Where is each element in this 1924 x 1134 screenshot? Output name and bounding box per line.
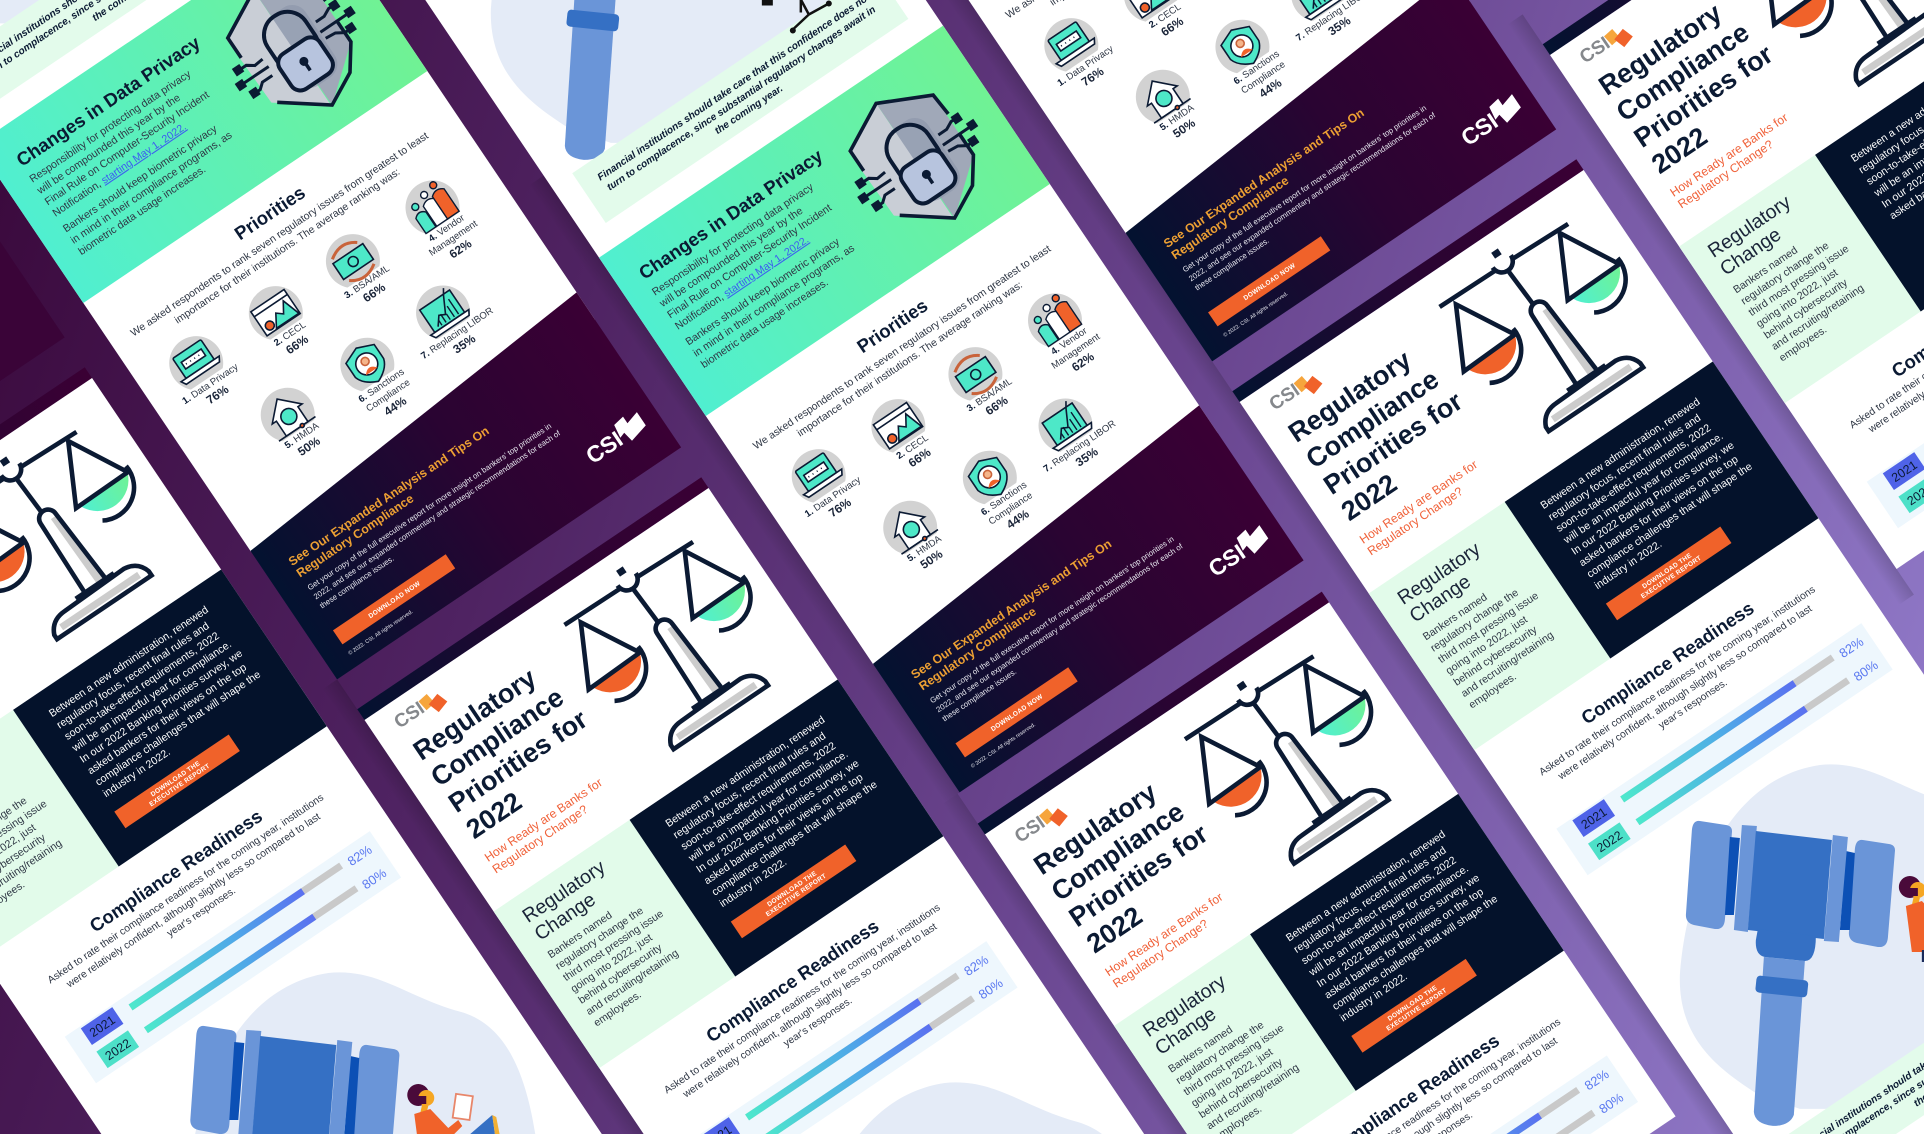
- title: Compliance: [1611, 17, 1755, 127]
- dark panel: introduction: Between a new administration, renewed: [1539, 396, 1702, 512]
- dark panel: introduction: In our 2022 Banking Priorities survey, we: [78, 647, 245, 766]
- title: 2022: [1646, 121, 1713, 180]
- panel: changes in data privacy: Notification, starting May 1, 2022.: [50, 121, 189, 219]
- logo: CSI: [1576, 20, 1635, 71]
- panel: changes in data privacy: Final Rule on Computer-Security Incident: [665, 202, 834, 321]
- dark panel: introduction: compliance challenges that will shape the: [710, 779, 880, 899]
- priority: replacing LIBOR: 35%: [450, 331, 478, 356]
- page: right column, regulatory compliance infographic: [1508, 0, 1924, 605]
- callout: the coming year.: [713, 83, 785, 137]
- bar chart: compliance readiness: 80%: [976, 975, 1006, 1002]
- green panel: regulatory change: employees.: [1467, 671, 1519, 711]
- green panel: regulatory change: Bankers named: [1166, 1024, 1235, 1076]
- icon: shield and padlock: [197, 0, 391, 144]
- illustration: gavel blob: [805, 1082, 1153, 1134]
- heading: priorities: Priorities: [230, 182, 309, 244]
- dark panel: introduction: compliance challenges that will shape the: [1585, 461, 1755, 581]
- dark panel: introduction: DOWNLOAD THE: [1387, 984, 1439, 1023]
- bar chart: compliance readiness: [1556, 623, 1893, 875]
- bar chart: compliance readiness: [681, 941, 1018, 1134]
- dark panel: introduction: EXECUTIVE REPORT: [1385, 987, 1448, 1033]
- priority: vendor management: 4. Vendor: [427, 213, 467, 245]
- page: far-left column, regulatory compliance infographic: [0, 346, 705, 1134]
- dark panel: introduction: will be an impactful year for compliance.: [686, 748, 850, 865]
- green panel: regulatory change: Change: [1716, 224, 1785, 280]
- dark panel: introduction: EXECUTIVE REPORT: [1640, 555, 1703, 600]
- panel: changes in data privacy: in mind in their compliance programs, as: [69, 129, 234, 247]
- dark panel: introduction: soon-to-take-effect requirements, 2022: [62, 630, 222, 743]
- priority: vendor management: [1015, 281, 1112, 384]
- priority: replacing LIBOR: 35%: [1073, 444, 1101, 469]
- footer panel: expanded analysis: See Our Expanded Analysis and Tips On: [908, 537, 1114, 682]
- green panel: regulatory change: employees.: [592, 989, 644, 1029]
- text: compliance intro: year's responses.: [782, 996, 854, 1050]
- logo: CSI: [391, 685, 450, 736]
- priority: data privacy: 1. Data Privacy: [1056, 43, 1116, 89]
- bar chart: compliance readiness: 2021: [87, 1013, 118, 1040]
- dark panel: introduction: [630, 680, 943, 977]
- bar chart: compliance readiness: 80%: [1596, 1089, 1627, 1117]
- page: far-left column, footer of upper page: [0, 190, 65, 569]
- priority: replacing LIBOR: 35%: [1326, 13, 1354, 38]
- priority: HMDA: [1123, 58, 1213, 151]
- logo: CSI: CSI: [1011, 812, 1049, 848]
- priority: sanctions compliance: 44%: [381, 393, 409, 419]
- illustration: gavel: [1680, 764, 1924, 1126]
- priority: sanctions compliance: Compliance: [1239, 59, 1287, 97]
- callout: [572, 0, 908, 223]
- priority: sanctions compliance: [327, 326, 424, 429]
- footer panel: expanded analysis: 2022, and see our expanded commentary and strategic recommendations for each of: [1187, 110, 1438, 283]
- dark panel: introduction: compliance challenges that will shape the: [93, 669, 263, 789]
- green panel: regulatory change: third most pressing issue: [1436, 590, 1541, 666]
- footer panel: expanded analysis: [233, 292, 681, 679]
- bar chart: compliance readiness: 2022: [103, 1036, 134, 1063]
- green panel: regulatory change: and recruiting/retaining: [584, 947, 681, 1018]
- footer panel: expanded analysis: Get your copy of the full executive report for more insight on bankers' top priorities in: [306, 421, 553, 592]
- bar chart: compliance readiness: 2021: [1579, 805, 1609, 832]
- green panel: regulatory change: Bankers named: [1421, 591, 1490, 643]
- priority: sanctions compliance: Compliance: [364, 377, 412, 415]
- subtitle: Regulatory Change?: [1675, 137, 1776, 211]
- bar chart: compliance readiness: 2022: [1594, 828, 1625, 855]
- dark panel: introduction: [1505, 362, 1818, 659]
- dark panel: introduction: regulatory focus, recent final rules and: [1292, 844, 1449, 956]
- priority: data privacy: [1029, 4, 1124, 101]
- panel: changes in data privacy: biometric data usage increases.: [76, 164, 208, 258]
- bar chart: compliance readiness: 80%: [1851, 657, 1881, 684]
- green panel: regulatory change: behind cybersecurity: [1451, 623, 1540, 689]
- green panel: regulatory change: and recruiting/retaining: [1204, 1062, 1301, 1132]
- dark panel: introduction: industry in 2022.: [1338, 971, 1410, 1024]
- text: priorities intro: importance for their institutions. The average ranking was:: [796, 280, 1025, 439]
- footer panel: expanded analysis: CSI: [1456, 108, 1502, 151]
- priority: CECL: 2. CECL: [894, 432, 931, 462]
- panel: changes in data privacy: will be compounded this year by the: [34, 92, 183, 197]
- page: fourth column, lower part of the infographic: [943, 0, 1556, 371]
- dark panel: introduction: DOWNLOAD THE: [766, 870, 818, 908]
- green panel: regulatory change: regulatory change the: [553, 905, 646, 972]
- green panel: regulatory change: regulatory change the: [1174, 1019, 1266, 1087]
- priority: BSA/AML: [313, 222, 403, 315]
- panel: changes in data privacy: Changes in Data Privacy: [12, 31, 204, 170]
- heading: compliance readiness: Compliance Readiness: [702, 915, 883, 1046]
- footer panel: expanded analysis: these compliance issues.: [1193, 236, 1271, 292]
- priority: vendor management: Management: [1050, 331, 1102, 372]
- title: Compliance: [425, 682, 569, 792]
- logo: CSI: CSI: [1576, 33, 1614, 68]
- priority: BSA/AML: 66%: [983, 393, 1011, 418]
- priority: replacing LIBOR: 7. Replacing LIBOR: [1042, 418, 1118, 475]
- priority: data privacy: 1. Data Privacy: [803, 474, 863, 520]
- priority: BSA/AML: 66%: [360, 280, 388, 305]
- footer panel: expanded analysis: Get your copy of the full executive report for more insight on bankers' top priorities in: [1181, 103, 1428, 274]
- title: 2022: [1336, 468, 1402, 527]
- priority: sanctions compliance: 44%: [1257, 75, 1285, 101]
- dark panel: introduction: DOWNLOAD THE: [1641, 552, 1694, 590]
- subtitle: How Ready are Banks for: [1102, 890, 1225, 979]
- green panel: regulatory change: third most pressing issue: [561, 908, 666, 984]
- priority: CECL: [1111, 0, 1201, 49]
- bar chart legend: [1867, 276, 1924, 528]
- title: Regulatory: [1593, 0, 1727, 101]
- dark panel: introduction: regulatory focus, recent final rules and: [1546, 412, 1703, 523]
- logo: CSI: [1011, 799, 1070, 850]
- green panel: regulatory change: behind cybersecurity: [576, 941, 665, 1007]
- priority: HMDA: [870, 489, 960, 582]
- dark panel: introduction: asked bankers for their views on the top: [1322, 886, 1486, 1001]
- priority: HMDA: 50%: [1170, 116, 1198, 141]
- callout: turn to complacence, since substantial regulatory changes await in: [605, 4, 878, 193]
- priorities grid: [154, 166, 542, 509]
- priority: data privacy: 76%: [826, 495, 854, 520]
- dark panel: introduction: soon-to-take-effect requirements, 2022: [1299, 854, 1459, 967]
- green panel: regulatory change: Regulatory: [1139, 970, 1230, 1042]
- footer panel: expanded analysis: See Our Expanded Analysis and Tips On: [286, 424, 492, 569]
- dark panel: introduction: Between a new administration, renewed: [1284, 828, 1448, 944]
- subtitle: Regulatory Change?: [1365, 484, 1466, 558]
- priority: sanctions compliance: [950, 439, 1047, 542]
- icon: scales of justice: [1417, 196, 1677, 452]
- dark panel: introduction: In our 2022 Banking Priorities survey, we: [1569, 439, 1737, 558]
- panel: changes in data privacy: in mind in their compliance programs, as: [691, 242, 857, 360]
- footer panel: expanded analysis: Get your copy of the full executive report for more insight on bankers' top priorities in: [928, 534, 1176, 705]
- dark panel: introduction: EXECUTIVE REPORT: [765, 873, 828, 918]
- green panel: regulatory change: behind cybersecurity: [1762, 276, 1850, 342]
- panel: changes in data privacy: biometric data usage increases.: [699, 277, 831, 371]
- footer panel: expanded analysis: 2022, and see our expanded commentary and strategic recommendations for each of: [312, 428, 563, 601]
- dark panel: introduction: soon-to-take-effect requirements, 2022: [1554, 422, 1713, 535]
- title: Priorities for: [443, 704, 593, 818]
- footer panel: expanded analysis: [1108, 0, 1556, 361]
- dark panel: introduction: Between a new administration, renewed: [663, 714, 827, 830]
- illustration: gavel and reader: [188, 972, 539, 1134]
- title: Regulatory: [1028, 777, 1162, 881]
- dark panel: introduction: [13, 570, 327, 867]
- dark panel: introduction: Between a new administration, renewed: [47, 604, 211, 720]
- text: compliance intro: year's responses.: [1657, 678, 1730, 732]
- title: Priorities for: [1629, 39, 1779, 153]
- green panel: regulatory change: Change: [531, 889, 600, 945]
- priority: data privacy: 1. Data Privacy: [180, 361, 241, 407]
- dark panel: introduction: industry in 2022.: [1593, 538, 1664, 592]
- green panel: regulatory change: Change: [1406, 571, 1475, 627]
- heading: compliance readiness: Compliance Readiness: [1577, 597, 1758, 728]
- panel: changes in data privacy: [599, 26, 1050, 416]
- page: second column, regulatory compliance infographic: [312, 427, 1313, 1134]
- priority: replacing LIBOR: 7. Replacing LIBOR: [419, 305, 496, 362]
- priority: CECL: [858, 387, 948, 480]
- text: priorities intro: importance for their institutions. The average ranking was:: [173, 167, 402, 326]
- text: compliance intro: year's responses.: [165, 886, 238, 940]
- dark panel: introduction: industry in 2022.: [717, 856, 789, 910]
- priority: HMDA: [248, 376, 338, 469]
- green panel: regulatory change: and recruiting/retaining: [1459, 629, 1556, 700]
- green panel: regulatory change: Bankers named: [1731, 244, 1800, 296]
- panel: changes in data privacy: Responsibility for protecting data privacy: [650, 181, 816, 298]
- footer panel: expanded analysis: Regulatory Compliance: [294, 491, 416, 580]
- priority: data privacy: [777, 435, 871, 532]
- bar chart: compliance readiness: 82%: [1582, 1066, 1612, 1093]
- green panel: regulatory change: [494, 820, 735, 1068]
- text: compliance intro: were relatively confident, although slightly less so compared to last: [64, 811, 323, 991]
- priority: CECL: 2. CECL: [272, 319, 309, 349]
- priority: data privacy: 76%: [204, 382, 232, 407]
- icon: scales of justice: [1163, 628, 1422, 884]
- page: left column, lower part of the infographic: [0, 0, 711, 696]
- bar chart: compliance readiness: 82%: [1836, 634, 1867, 661]
- priority: CECL: 66%: [283, 332, 311, 357]
- priority: replacing LIBOR: [393, 266, 503, 373]
- bar chart: compliance readiness: 80%: [359, 865, 390, 892]
- green panel: regulatory change: going into 2022, just: [1189, 1046, 1275, 1110]
- green panel: regulatory change: and recruiting/retaining: [1769, 282, 1866, 353]
- dark panel: introduction: asked bankers for their views on the top: [85, 661, 249, 777]
- title: 2022: [1081, 901, 1148, 959]
- green panel: regulatory change: third most pressing issue: [1182, 1022, 1286, 1098]
- heading: priorities: Priorities: [853, 295, 932, 357]
- priorities grid: [1029, 0, 1417, 191]
- green panel: regulatory change: Regulatory: [519, 856, 610, 927]
- green panel: regulatory change: employees.: [1777, 324, 1829, 364]
- panel: changes in data privacy: Notification, starting May 1, 2022.: [673, 234, 811, 332]
- footer panel: expanded analysis: these compliance issues.: [941, 667, 1018, 723]
- dark panel: introduction: regulatory focus, recent final rules and: [671, 730, 828, 841]
- footer panel: expanded analysis: CSI: [581, 426, 627, 469]
- priority: sanctions compliance: 6. Sanctions: [357, 367, 407, 405]
- text: compliance intro: Asked to rate their compliance readiness for the coming year, institutions: [1538, 584, 1818, 778]
- priorities grid: [777, 279, 1164, 622]
- footer panel: expanded analysis: DOWNLOAD NOW: [367, 580, 422, 620]
- priority: sanctions compliance: 6. Sanctions: [1232, 49, 1282, 87]
- bar chart: compliance readiness: 82%: [345, 842, 375, 869]
- text: priorities intro: We asked respondents to rank seven regulatory issues from greatest to least: [751, 244, 1053, 452]
- dark panel: introduction: will be an impactful year for compliance.: [1306, 863, 1471, 979]
- illustration: gavel: [491, 0, 839, 160]
- dark panel: introduction: [1250, 794, 1564, 1091]
- priority: vendor management: 4. Vendor: [1049, 326, 1089, 358]
- dark panel: introduction: soon-to-take-effect requirements, 2022: [679, 740, 838, 853]
- priority: sanctions compliance: 6. Sanctions: [979, 480, 1029, 518]
- illustration: reader in chair: [1899, 876, 1924, 1006]
- bar chart: compliance readiness: 82%: [961, 952, 992, 979]
- title: Compliance: [1301, 364, 1444, 474]
- priority: HMDA: 50%: [918, 547, 946, 572]
- footer panel: expanded analysis: © 2022. CSI. All rights reserved.: [347, 608, 414, 657]
- bar chart: compliance readiness: [1302, 1055, 1638, 1134]
- priority: CECL: [236, 274, 326, 367]
- footer panel: expanded analysis: CSI: [1204, 539, 1250, 582]
- title: Compliance: [1046, 796, 1190, 907]
- footer panel: expanded analysis: DOWNLOAD NOW: [990, 693, 1045, 733]
- dark panel: introduction: will be an impactful year for compliance.: [69, 638, 234, 755]
- green panel: regulatory change: going into 2022, just: [1754, 267, 1840, 330]
- panel: changes in data privacy: will be compounded this year by the: [657, 205, 805, 310]
- subtitle: How Ready are Banks for: [1357, 457, 1480, 547]
- priority: BSA/AML: 3. BSA/AML: [342, 263, 392, 301]
- priority: vendor management: 62%: [1069, 349, 1097, 374]
- subtitle: How Ready are Banks for: [482, 775, 605, 865]
- icon: shield and padlock: [820, 63, 1013, 257]
- text: compliance intro: Asked to rate their compliance readiness for the coming year, institutions: [46, 792, 326, 986]
- priority: sanctions compliance: [1202, 8, 1299, 111]
- title: Regulatory: [408, 663, 542, 766]
- illustration: reader in chair: [700, 0, 832, 33]
- green panel: regulatory change: [1679, 155, 1921, 403]
- priority: CECL: 66%: [1158, 14, 1186, 39]
- logo: CSI: [1266, 367, 1325, 418]
- footer panel: expanded analysis: © 2022. CSI. All rights reserved.: [1222, 290, 1289, 339]
- priority: HMDA: 5. HMDA: [1158, 102, 1197, 133]
- panel: changes in data privacy: Bankers should keep biometric privacy: [683, 236, 842, 348]
- priority: sanctions compliance: Compliance: [987, 490, 1035, 528]
- heading: compliance readiness: Compliance Readiness: [86, 805, 266, 936]
- icon: scales of justice: [0, 404, 185, 660]
- green panel: regulatory change: [1369, 502, 1610, 750]
- dark panel: introduction: DOWNLOAD THE: [150, 760, 202, 798]
- dark panel: introduction: EXECUTIVE REPORT: [148, 763, 211, 808]
- priority: CECL: 2. CECL: [1147, 1, 1184, 31]
- green panel: regulatory change: [1114, 934, 1356, 1134]
- green panel: regulatory change: Regulatory: [1394, 538, 1485, 609]
- bar chart: compliance readiness: [65, 831, 401, 1083]
- blob: [0, 0, 207, 23]
- callout: [0, 0, 286, 110]
- dark panel: introduction: compliance challenges that will shape the: [1330, 893, 1500, 1013]
- dark panel: introduction: In our 2022 Banking Priorities survey, we: [694, 757, 861, 876]
- dark panel: introduction: will be an impactful year for compliance.: [1561, 430, 1725, 547]
- bar chart legend: 2021: [1889, 458, 1920, 485]
- dark panel: introduction: [1815, 15, 1924, 312]
- priority: sanctions compliance: 44%: [1004, 506, 1032, 532]
- green panel: regulatory change: regulatory change the: [1428, 587, 1521, 654]
- priority: HMDA: 50%: [295, 434, 323, 459]
- subtitle: Regulatory Change?: [1110, 916, 1211, 991]
- green panel: regulatory change: third most pressing issue: [1747, 243, 1851, 319]
- priority: CECL: 66%: [906, 445, 934, 470]
- green panel: regulatory change: Regulatory: [1704, 191, 1795, 262]
- panel: changes in data privacy: Final Rule on Computer-Security Incident: [43, 89, 212, 208]
- priority: vendor management: 62%: [447, 236, 475, 261]
- page: middle column, lower part of the infographic: [323, 0, 1338, 812]
- title: Priorities for: [1318, 386, 1468, 500]
- page: middle column, regulatory compliance infographic: [943, 562, 1693, 1134]
- subtitle: How Ready are Banks for: [1667, 110, 1790, 200]
- dark panel: introduction: asked bankers for their views on the top: [1577, 453, 1740, 569]
- priority: data privacy: 76%: [1079, 64, 1107, 89]
- green panel: regulatory change: going into 2022, just: [1444, 614, 1530, 677]
- text: compliance intro: Asked to rate their compliance readiness for the coming year, institutions: [662, 902, 942, 1096]
- green panel: regulatory change: [0, 710, 119, 958]
- title: Priorities for: [1064, 818, 1214, 933]
- footer panel: expanded analysis: these compliance issues.: [318, 554, 396, 610]
- green panel: regulatory change: going into 2022, just: [569, 932, 655, 995]
- priority: BSA/AML: 3. BSA/AML: [965, 376, 1015, 414]
- panel: changes in data privacy: Bankers should keep biometric privacy: [61, 123, 220, 235]
- green panel: regulatory change: regulatory change the: [1739, 240, 1831, 307]
- logo: CSI: CSI: [1266, 380, 1304, 415]
- icon: scales of justice: [1728, 0, 1924, 105]
- dark panel: introduction: In our 2022 Banking Priorities survey, we: [1315, 872, 1482, 990]
- green panel: regulatory change: behind cybersecurity: [1197, 1056, 1285, 1121]
- text: priorities intro: We asked respondents to rank seven regulatory issues from greatest to least: [129, 131, 431, 339]
- text: compliance intro: were relatively confident, although slightly less so compared to last: [1556, 603, 1814, 783]
- subtitle: Regulatory Change?: [490, 802, 590, 876]
- priority: replacing LIBOR: [1268, 0, 1378, 55]
- footer panel: expanded analysis: DOWNLOAD NOW: [1243, 262, 1297, 302]
- dark panel: introduction: industry in 2022.: [101, 746, 173, 800]
- green panel: regulatory change: Bankers named: [546, 909, 615, 961]
- priority: replacing LIBOR: [1015, 379, 1126, 486]
- priority: HMDA: 5. HMDA: [905, 533, 944, 564]
- title: Regulatory: [1283, 345, 1417, 448]
- footer panel: expanded analysis: Regulatory Compliance: [1169, 173, 1291, 262]
- priority: data privacy: [154, 322, 248, 419]
- panel: changes in data privacy: [0, 0, 427, 303]
- priority: vendor management: Management: [427, 218, 480, 259]
- footer panel: expanded analysis: See Our Expanded Analysis and Tips On: [1161, 106, 1367, 251]
- dark panel: introduction: regulatory focus, recent final rules and: [55, 620, 212, 731]
- footer panel: expanded analysis: © 2022. CSI. All rights reserved.: [969, 721, 1037, 770]
- panel: changes in data privacy: Changes in Data Privacy: [635, 144, 827, 283]
- green panel: regulatory change: Change: [1151, 1003, 1220, 1060]
- title: 2022: [461, 786, 527, 845]
- footer panel: expanded analysis: [855, 405, 1304, 792]
- page: fourth column, regulatory compliance infographic: [1179, 109, 1924, 1134]
- footer panel: expanded analysis: 2022, and see our expanded commentary and strategic recommendations for each of: [934, 541, 1185, 714]
- logo: CSI: CSI: [391, 698, 429, 733]
- text: compliance intro: were relatively confident, although slightly less so compared to last: [681, 921, 939, 1101]
- priority: vendor management: [393, 168, 489, 271]
- dark panel: introduction: asked bankers for their views on the top: [702, 771, 865, 887]
- panel: changes in data privacy: Responsibility for protecting data privacy: [27, 68, 194, 185]
- priority: BSA/AML: [935, 335, 1025, 428]
- icon: scales of justice: [542, 514, 801, 770]
- footer panel: expanded analysis: Regulatory Compliance: [916, 604, 1039, 693]
- priority: HMDA: 5. HMDA: [283, 420, 322, 451]
